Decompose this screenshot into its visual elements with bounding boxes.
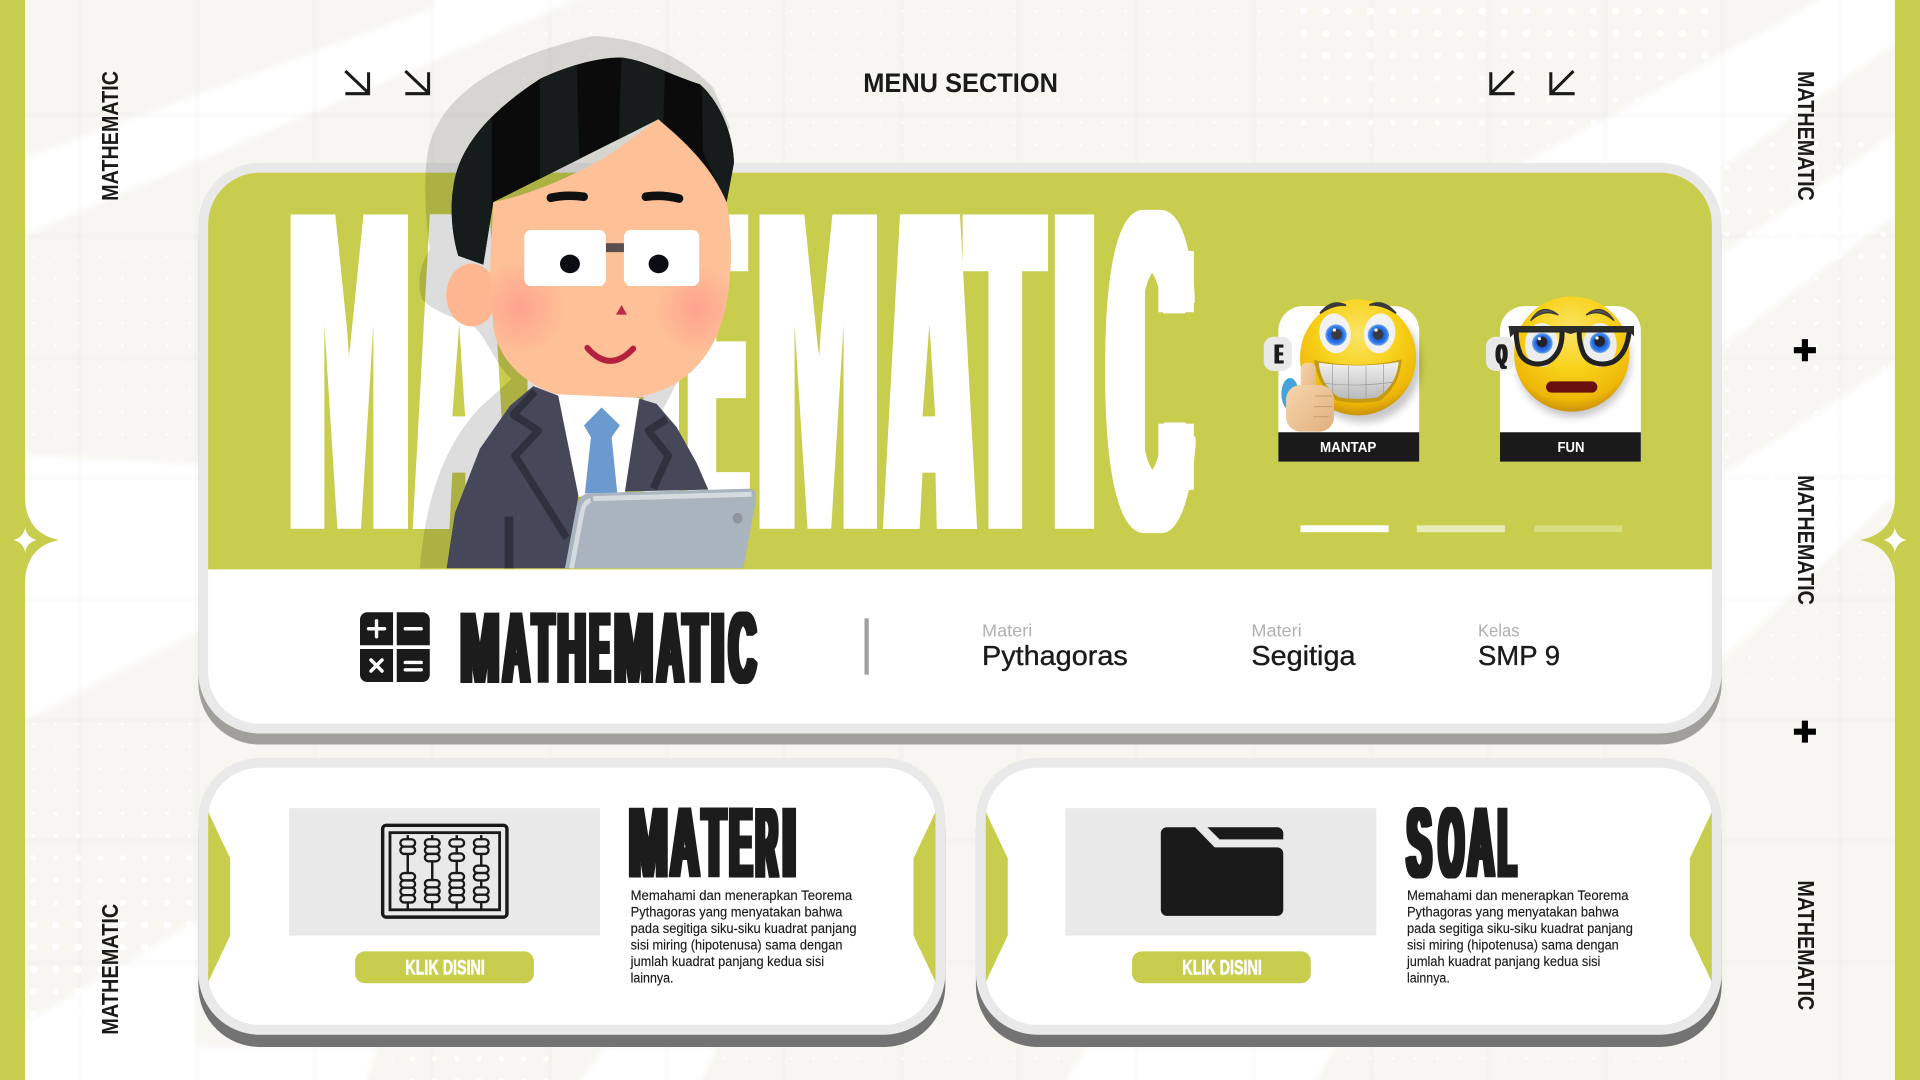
info: materi segitiga: Segitiga [1251,640,1356,671]
panel: main card [198,123,1722,744]
side label: top left: MATHEMATIC [97,71,123,201]
card: fun emoji: FUN [1558,440,1584,456]
title: mathematic: H [558,593,586,704]
glasses [524,230,699,286]
eyes [560,255,669,273]
heading: materi [629,788,797,898]
title: mathematic: A [503,593,529,704]
heading: materi: I [782,788,797,898]
heading: materi: M [629,788,668,898]
hair [447,54,737,270]
info: kelas smp 9: Kelas [1478,621,1520,641]
title: mathematic: M [460,593,499,704]
body text: soal: Pythagoras yang menyatakan bahwa [1407,904,1619,920]
slider indicators [1300,525,1622,532]
title: mathematic: C [729,593,756,704]
hero title: C [1109,123,1190,621]
tablet [565,489,756,568]
body text: materi [630,887,857,986]
badge: Q [1486,337,1514,371]
body text: materi: sisi miring (hipotenusa) sama dengan [631,937,842,953]
side label: top right: MATHEMATIC [1793,71,1819,201]
body text: materi: jumlah kuadrat panjang kedua sisi [630,953,824,969]
icon panel: folder [1065,808,1376,936]
button: klik disini: KLIK DISINI [1182,956,1262,980]
body text: materi: Pythagoras yang menyatakan bahwa [631,904,843,920]
person drop shadow [419,36,730,568]
info: materi pythagoras: Pythagoras [982,640,1128,671]
heading: soal: O [1439,788,1464,898]
side label: bottom right: MATHEMATIC [1793,880,1819,1010]
button: klik disini [1132,951,1311,983]
left band with spike and star [0,0,59,1080]
body text: soal: lainnya. [1407,970,1450,986]
info: materi segitiga [1251,621,1356,671]
nose [616,305,627,315]
badge: E [1264,337,1292,371]
info: materi segitiga: Materi [1251,621,1302,641]
hero title: E [691,123,744,621]
hero title: M [758,123,878,621]
ear [446,264,497,326]
arrows: top right pair [1491,71,1575,94]
heading: soal [1407,788,1516,898]
heading: materi: A [671,788,699,898]
card: mantap emoji: MANTAP [1320,440,1377,456]
icon: nerd emoji with glasses [1509,296,1633,417]
body text: soal: sisi miring (hipotenusa) sama dengan [1407,937,1619,953]
panel: soal card [976,758,1722,1047]
icon panel: abacus [289,808,600,936]
icon: calculator operators [360,612,430,682]
info: materi pythagoras: Materi [982,621,1032,641]
button: klik disini [355,951,534,983]
heading: soal: L [1498,788,1516,898]
badge: E: E [1275,339,1283,370]
face [475,119,738,400]
body text: soal: jumlah kuadrat panjang kedua sisi [1406,953,1600,969]
body text: soal [1406,887,1633,986]
body text: soal: pada segitiga siku-siku kuadrat panjang [1407,920,1633,936]
panel: materi card [198,758,945,1047]
title: mathematic: E [590,593,609,704]
body text: materi: pada segitiga siku-siku kuadrat panjang [631,920,857,936]
body text: materi: lainnya. [631,970,673,986]
badge: Q: Q [1496,339,1507,370]
suit jacket [447,386,708,568]
arrows: top left pair [345,71,429,94]
body text: soal: Memahami dan menerapkan Teorema [1407,887,1629,903]
heading: soal: S [1407,788,1431,898]
hero title: M [289,123,409,621]
hero title: A [891,123,969,621]
heading: menu section: MENU SECTION [863,68,1058,98]
title: mathematic: I [711,593,725,704]
hero title: A [421,123,500,621]
info: materi pythagoras [982,621,1128,671]
heading: materi: E [730,788,752,898]
icon: plus lower right [1794,721,1816,743]
title: mathematic [460,593,756,704]
icon: plus upper right [1794,339,1816,361]
body text: materi: Memahami dan menerapkan Teorema [631,887,852,903]
hero title: I [1053,123,1096,621]
hero title [289,123,1207,621]
icon: grinning emoji with thumb up [1281,299,1421,432]
heading: materi: R [756,788,777,898]
side label: bottom left: MATHEMATIC [97,904,123,1035]
card: mantap emoji [1264,299,1421,462]
info: vertical divider [864,618,869,675]
eyebrows [551,196,679,199]
title: mathematic: T [683,593,707,704]
title: mathematic: T [533,593,554,704]
hero title: T [511,123,577,621]
right band with spike and star [1860,0,1920,1080]
hero title: H [587,123,679,621]
card: fun emoji [1486,296,1641,462]
mouth [587,348,633,361]
hero title: T [970,123,1041,621]
info: kelas smp 9: SMP 9 [1478,640,1560,671]
side label: middle right: MATHEMATIC [1793,475,1819,605]
heading: materi: T [702,788,725,898]
button: klik disini: KLIK DISINI [405,956,485,980]
shirt and tie [557,394,640,497]
illustration: man with glasses and tablet [419,36,756,568]
title: mathematic: A [658,593,683,704]
info: kelas smp 9 [1478,621,1560,671]
heading: soal: A [1468,788,1494,898]
hero: green banner [208,173,1712,569]
title: mathematic: M [614,593,653,704]
